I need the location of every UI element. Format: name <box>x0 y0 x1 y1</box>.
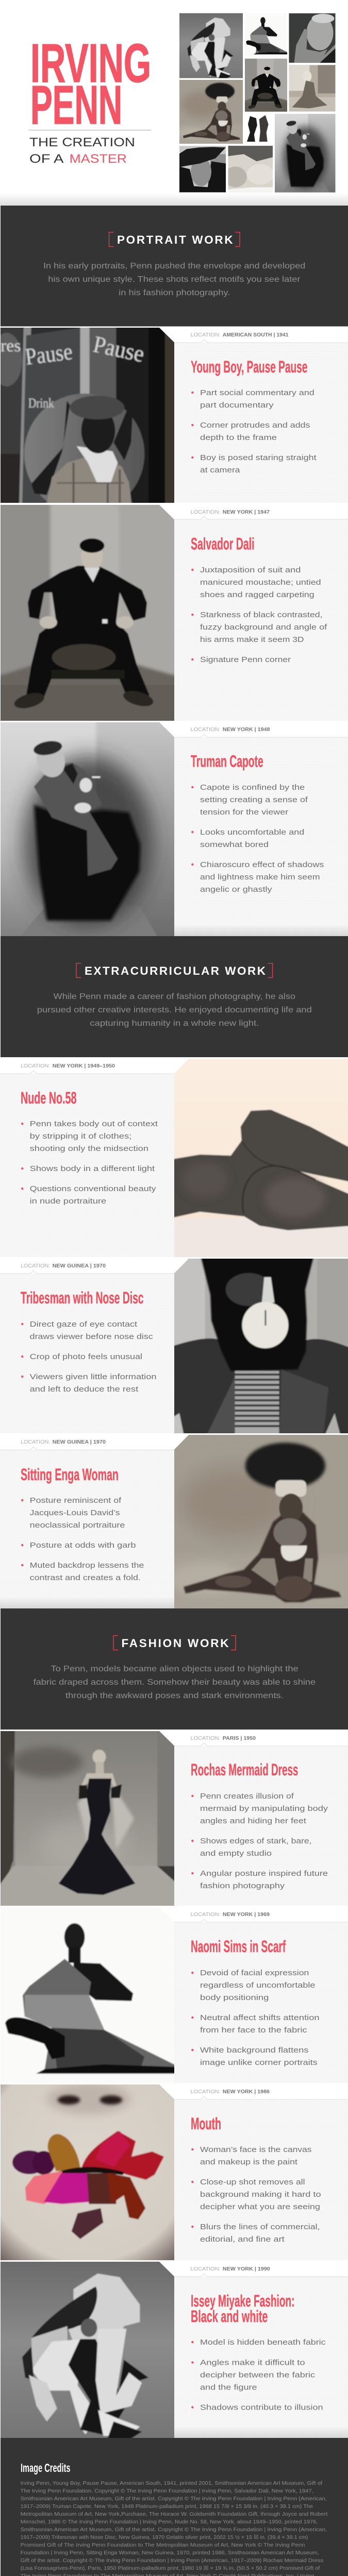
bullet list <box>191 2338 326 2412</box>
photo: Salvador Dali <box>1 505 174 721</box>
title: IRVING <box>30 33 151 94</box>
location label: LOCATION: <box>21 1063 50 1069</box>
credits text: 1917–2009) Truman Capote, New York, 1948 Platinum-palladium print, 1968 15 7/8 × 15 3/8 in. (40.3 × 39.1 cm) The <box>21 2503 313 2510</box>
location label: NEW YORK | 1990 <box>223 2266 270 2272</box>
photo: young boy <box>1 328 174 503</box>
bullet list: Model is hidden beneath fabric <box>200 2338 326 2347</box>
text panel background <box>0 1274 174 1433</box>
bullet list: shoes and ragged carpeting <box>200 590 314 599</box>
heading: fashion work: FASHION WORK <box>122 1637 229 1650</box>
bullet list: manicured moustache; untied <box>200 578 321 587</box>
panel: image credits <box>1 2438 348 2576</box>
panel: Tribesman with Nose Disc <box>0 1253 348 1438</box>
bullet list: Viewers given little information <box>30 1372 157 1381</box>
bullet list: fashion photography <box>200 1882 285 1890</box>
bullet list: Posture reminiscent of <box>30 1496 122 1505</box>
collage: Salvador Dali <box>245 59 287 112</box>
credits text: Metropolitan Museum of Art, New York,Purchase, The Horace W. Goldsmith Foundation Gift, through Joyce and Robert <box>21 2511 327 2517</box>
text panel background <box>0 1450 174 1608</box>
fashion intro text: through the awkward poses and stark environments. <box>65 1691 284 1700</box>
photo: Tribesman with Nose Disc <box>174 1259 348 1433</box>
location label: NEW YORK | 1986 <box>223 2089 270 2095</box>
text panel background <box>174 1922 348 2083</box>
bullet list: from her face to the fabric <box>200 2026 307 2035</box>
bullet list: Blurs the lines of commercial, <box>200 2223 320 2231</box>
title: MASTER <box>69 152 127 166</box>
location label: NEW YORK | 1949–1950 <box>53 1063 115 1069</box>
location label: LOCATION: <box>191 1736 221 1741</box>
bullet list: Looks uncomfortable and <box>200 828 304 837</box>
location label: NEW YORK | 1969 <box>223 1912 270 1918</box>
credits text: Irving Penn, Young Boy, Pause Pause, American South, 1941, printed 2001, Smithsonian American Art Museum, Gift of <box>21 2480 322 2486</box>
panel: fashion work intro <box>1 1608 348 1730</box>
collage: Enga woman <box>179 80 243 144</box>
heading: Mouth <box>191 2114 221 2133</box>
panel: Salvador Dali <box>0 497 348 729</box>
bullet list <box>21 1120 158 1206</box>
panel: Rochas Mermaid Dress <box>0 1726 348 1911</box>
bullet list: his arms make it seem 3D <box>200 635 304 644</box>
photo: Issey Miyake Fashion <box>1 2262 174 2438</box>
location label <box>191 332 289 338</box>
bullet list: Signature Penn corner <box>200 655 291 664</box>
bullet list: angles and hiding her feet <box>200 1817 307 1825</box>
photo: Sitting Enga Woman <box>174 1435 348 1608</box>
bullet list: Muted backdrop lessens the <box>30 1561 144 1570</box>
location label <box>21 1439 106 1445</box>
bullet list: Penn takes body out of context <box>30 1120 158 1128</box>
bullet list: by stripping it of clothes; <box>30 1132 131 1141</box>
bullet list: and makeup is the paint <box>200 2158 298 2166</box>
heading: portrait work: PORTRAIT WORK <box>117 233 233 246</box>
bullet list: Shows edges of stark, bare, <box>200 1837 311 1845</box>
credits text: Foundation | Irving Penn, Sitting Enga Woman, New Guinea, 1970, printed 1986, Smithsonian American Art Museum, <box>21 2550 319 2556</box>
credits text: Menschel, 1986 © The Irving Penn Foundation | Irving Penn, Nude No. 58, New York, about 1949–1950, printed 1976, <box>21 2519 318 2525</box>
panel: Nude No.58 <box>0 1054 348 1262</box>
location label: PARIS | 1950 <box>223 1736 256 1741</box>
bullet list: Neutral affect shifts attention <box>200 2013 320 2022</box>
bullet list: regardless of uncomfortable <box>200 1981 315 1990</box>
photo: Rochas Mermaid Dress <box>1 1731 174 1906</box>
bullet list: and left to deduce the rest <box>30 1385 139 1394</box>
collage: man with hand on face <box>289 13 335 63</box>
bullet list: somewhat bored <box>200 840 269 849</box>
location label <box>21 1263 106 1269</box>
fashion intro text: fabric draped across them. Somehow their beauty was able to shine <box>34 1678 316 1687</box>
photo collage <box>177 11 338 195</box>
collage: Naomi Sims <box>246 17 287 55</box>
text panel background <box>0 1074 174 1257</box>
credits text <box>21 2480 328 2576</box>
bullet list: part documentary <box>200 401 274 410</box>
bullet list <box>191 1792 328 1890</box>
location label <box>191 1912 270 1918</box>
fashion intro text <box>34 1665 316 1700</box>
location label <box>191 1736 256 1741</box>
location label: LOCATION: <box>191 1912 221 1918</box>
bullet list: Jacques-Louis David’s <box>30 1509 120 1517</box>
text panel background <box>174 737 348 936</box>
heading <box>191 2292 295 2326</box>
location label: LOCATION: <box>21 1263 50 1269</box>
location label: LOCATION: <box>191 2089 221 2095</box>
title: THE CREATION <box>29 135 135 149</box>
panel: extracurricular work intro <box>1 936 348 1057</box>
credits text: Smithsonian American Art Museum, Gift of the artist. Copyright © The Irving Penn Foundation | Irving Penn (American, <box>21 2527 327 2533</box>
bullet list: Woman’s face is the canvas <box>200 2145 311 2154</box>
bullet list: shooting only the midsection <box>30 1144 148 1153</box>
location label: AMERICAN SOUTH | 1941 <box>223 332 289 338</box>
bullet list: Capote is confined by the <box>200 783 305 792</box>
bullet list: fuzzy background and angle of <box>200 623 327 632</box>
panel: Young Boy, Pause Pause <box>0 323 348 514</box>
bullet list: and the figure <box>200 2383 257 2392</box>
location label <box>191 2089 270 2095</box>
bullet list: Chiaroscuro effect of shadows <box>200 860 324 869</box>
bullet list: neoclassical portraiture <box>30 1521 125 1530</box>
text panel background <box>174 519 348 721</box>
location label: NEW GUINEA | 1970 <box>53 1263 106 1269</box>
credits text: Promised Gift of The Irving Penn Foundation to The Metropolitan Museum of Art, New York © The Irving Penn <box>21 2542 305 2548</box>
bullet list: Angles make it difficult to <box>200 2359 305 2367</box>
bullet list: and lightness make him seem <box>200 873 320 882</box>
location label <box>191 727 270 733</box>
portrait intro text: his own unique style. These shots reflect motifs you see later <box>48 275 301 284</box>
bullet list: in nude portraiture <box>30 1197 106 1206</box>
title: OF A <box>29 152 64 166</box>
extracurricular intro text: pursued other creative interests. He enjoyed documenting life and <box>37 1006 312 1014</box>
bullet list: body positioning <box>200 1993 269 2002</box>
bullet list <box>191 566 327 664</box>
photo: Naomi Sims in Scarf <box>4 1922 174 2075</box>
title <box>29 33 151 166</box>
bullet list: setting creating a sense of <box>200 795 308 804</box>
portrait intro text <box>43 262 305 297</box>
bullet list: and empty studio <box>200 1849 272 1858</box>
bullet list: depth to the frame <box>200 433 277 442</box>
fashion intro text: To Penn, models became alien objects used to highlight the <box>51 1665 299 1673</box>
panel: Mouth <box>0 2079 348 2265</box>
collage: figures in costume <box>247 115 269 142</box>
heading: Naomi Sims in Scarf <box>191 1937 286 1956</box>
collage: Picasso <box>179 146 226 193</box>
bullet list <box>191 783 324 894</box>
panel: portrait work intro <box>1 206 348 327</box>
collage: Issey Miyake <box>179 13 243 78</box>
heading: Nude No.58 <box>21 1089 76 1107</box>
bullet list: Devoid of facial expression <box>200 1969 309 1977</box>
credits text: Smithsonian American Art Museum, Gift of the artist. Copyright © The Irving Penn Foundation | Irving Penn (American, <box>21 2496 327 2502</box>
heading: image credits: Image Credits <box>21 2461 70 2475</box>
heading: Salvador Dali <box>191 535 255 553</box>
bullet list: Starkness of black contrasted, <box>200 611 323 619</box>
bullet list: Direct gaze of eye contact <box>30 1320 138 1329</box>
bullet list: angelic or ghastly <box>200 885 272 894</box>
location label: LOCATION: <box>191 727 221 733</box>
bullet list: contrast and creates a fold. <box>30 1573 141 1582</box>
location label: LOCATION: <box>191 510 221 515</box>
bullet list: decipher what you are seeing <box>200 2202 320 2211</box>
panel: Naomi Sims in Scarf <box>0 1902 348 2088</box>
bullet list <box>21 1496 144 1582</box>
photo: Truman Capote <box>1 722 174 936</box>
heading: Tribesman with Nose Disc <box>21 1289 143 1307</box>
photo: Nude No.58 <box>174 1059 348 1257</box>
location label: NEW GUINEA | 1970 <box>53 1439 106 1445</box>
collage: Capote <box>275 114 335 193</box>
photo: Mouth <box>1 2084 174 2260</box>
bullet list: Juxtaposition of suit and <box>200 566 301 574</box>
panel: Sitting Enga Woman <box>0 1430 348 1614</box>
bullet list: Penn creates illusion of <box>200 1792 294 1801</box>
location label: LOCATION: <box>191 2266 221 2272</box>
location label <box>191 2266 270 2272</box>
shadow above portrait section <box>0 193 348 206</box>
location label <box>191 510 270 515</box>
heading: Truman Capote <box>191 752 263 771</box>
bullet list <box>191 1969 320 2067</box>
credits text: 1917–2009) Tribesman with Nose Disc, New Guinea, 1970 Gelatin silver print, 2002 15 ½ × 15 ☒ in. (39.4 × 39.1 cm) <box>21 2534 308 2540</box>
bullet list <box>191 2145 321 2244</box>
panel: Issey Miyake Fashion <box>0 2257 348 2443</box>
bullet list: at camera <box>200 466 240 474</box>
collage: nude <box>228 146 273 193</box>
portrait intro text: in his fashion photography. <box>119 289 230 297</box>
bullet list: Questions conventional beauty <box>30 1184 156 1193</box>
collage: woman in Marrakech <box>289 65 335 111</box>
location label: LOCATION: <box>191 332 221 338</box>
credits text: (Lisa Fonssagrives-Penn), Paris, 1950 Platinum-palladium print, 1980 19 ☒ × 19 ¾ in. (50.5 × 50.2 cm) Promised Gift of <box>21 2565 320 2571</box>
bullet list: tension for the viewer <box>200 808 288 817</box>
text panel background <box>174 1746 348 1906</box>
bullet list: Close-up shot removes all <box>200 2178 305 2187</box>
heading: Black and white <box>191 2307 268 2326</box>
location label: NEW YORK | 1948 <box>223 727 270 733</box>
panel: Truman Capote <box>0 715 348 944</box>
credits text: The Irving Penn Foundation. Copyright © The Irving Penn Foundation | Irving Penn, Salvador Dali, New York, 1947, <box>21 2488 313 2494</box>
bullet list: Shows body in a different light <box>30 1164 155 1173</box>
bullet list: draws viewer before nose disc <box>30 1332 153 1341</box>
heading: extracurricular work: EXTRACURRICULAR WORK <box>85 964 266 977</box>
bullet list: Part social commentary and <box>200 388 314 397</box>
text panel background <box>174 343 348 503</box>
location label <box>21 1063 115 1069</box>
extracurricular intro text: While Penn made a career of fashion photography, he also <box>54 992 295 1001</box>
bullet list: decipher between the fabric <box>200 2371 316 2379</box>
bullet list <box>21 1320 157 1394</box>
bullet list <box>191 388 317 474</box>
heading: Sitting Enga Woman <box>21 1465 119 1484</box>
bullet list: Posture at odds with garb <box>30 1541 136 1550</box>
extracurricular intro text <box>37 992 312 1028</box>
text panel background <box>174 2277 348 2438</box>
extracurricular intro text: capturing humanity in a whole new light. <box>90 1019 259 1028</box>
bullet list: Angular posture inspired future <box>200 1869 328 1878</box>
bullet list: editorial, and fine art <box>200 2235 285 2244</box>
bullet list: Boy is posed staring straight <box>200 453 317 462</box>
portrait intro text: In his early portraits, Penn pushed the envelope and developed <box>43 262 305 270</box>
location label: NEW YORK | 1947 <box>223 510 270 515</box>
title: PENN <box>30 75 122 135</box>
location label: LOCATION: <box>21 1439 50 1445</box>
bullet list: Corner protrudes and adds <box>200 421 310 430</box>
header background <box>0 0 348 206</box>
credits text: Gift of the artist. Copyright © The Irving Penn Foundation | Irving Penn (American, 1917–2009) Rochas Mermaid Dress <box>21 2557 323 2564</box>
bullet list: Shadows contribute to illusion <box>200 2403 323 2412</box>
text panel background <box>174 2099 348 2260</box>
bullet list: background making it hard to <box>200 2190 321 2199</box>
bullet list: Crop of photo feels unusual <box>30 1352 142 1361</box>
bullet list: image unlike corner portraits <box>200 2058 318 2067</box>
bullet list: White background flattens <box>200 2046 308 2055</box>
bullet list: mermaid by manipulating body <box>200 1804 328 1813</box>
